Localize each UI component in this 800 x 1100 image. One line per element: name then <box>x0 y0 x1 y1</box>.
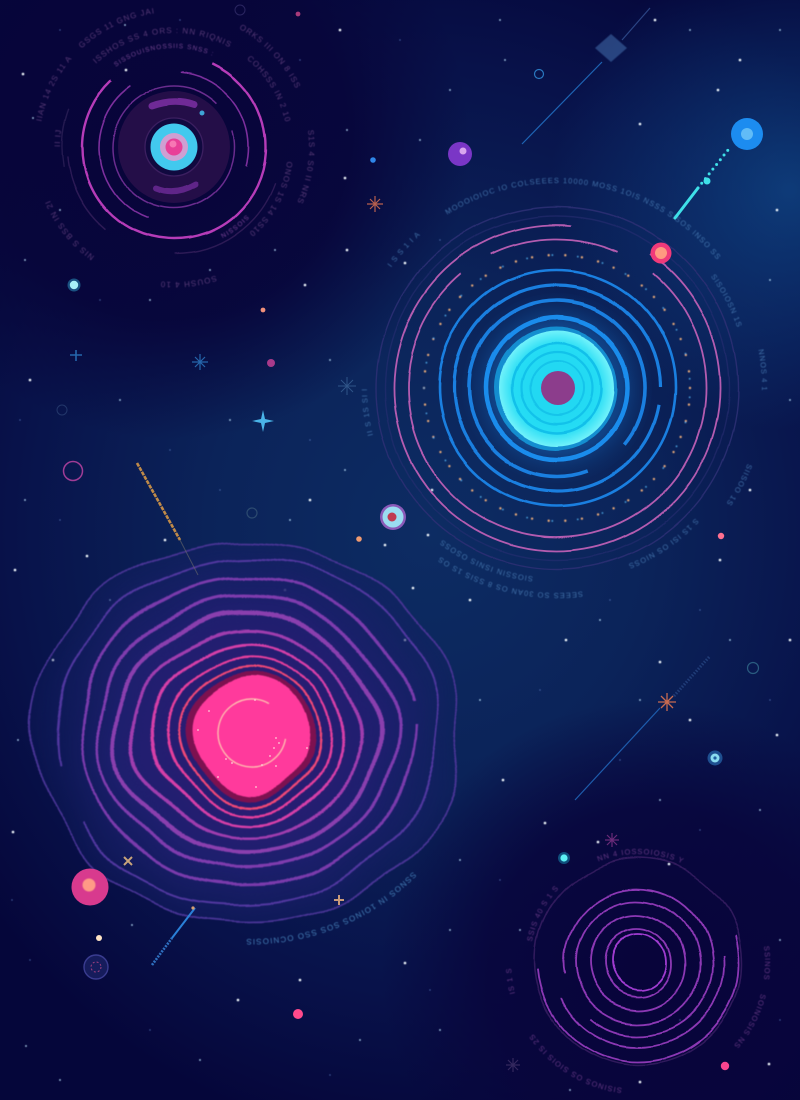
sparks on core <box>198 700 307 787</box>
orbital text: SIOSSIN <box>220 215 250 238</box>
orbital text: S1S 4 S0 II NRS <box>298 130 316 204</box>
planet: purple <box>448 142 472 166</box>
orbital text: NIS S BSS IN 2I <box>45 200 94 260</box>
star: dim lower <box>506 1058 520 1072</box>
planet: pink lower <box>72 868 108 906</box>
ring: dim right <box>748 662 758 674</box>
blue rings <box>438 269 676 507</box>
orbital text: SOUSH 4 10 <box>160 276 217 288</box>
ring: dim left <box>57 405 67 415</box>
dot: cyan <box>68 278 80 292</box>
small planet: right <box>708 750 722 766</box>
pink rings <box>330 161 784 615</box>
ring: dim top <box>235 5 245 15</box>
orbital text: ONOS 1S 14 SS10 <box>250 162 293 236</box>
orbital text: SIISOO 1S <box>726 464 752 506</box>
small ring: upper <box>534 70 544 78</box>
rings <box>30 531 464 933</box>
orbital text: SISINOS OS SIOIS IS 2S <box>529 1034 622 1094</box>
orbital text: SSINOS <box>764 946 770 980</box>
dot: spark <box>334 895 344 905</box>
dot: pink lower <box>293 1009 303 1019</box>
orbital text: MOOOIOIOC IO COLSEEES 10000 MOSS 1OIS NSSS SISOS INSO SS <box>444 177 720 260</box>
comet: cyan <box>675 150 728 218</box>
orbital text: IS 1 S S1 <box>506 968 515 994</box>
orbital text: SISSOUISNOSSIIS SNSS : <box>114 43 214 67</box>
dot: pink right <box>721 1062 729 1070</box>
star: left blue <box>70 350 82 361</box>
dot: spark left <box>124 857 132 865</box>
streak: lower right <box>575 656 710 800</box>
orbital text: SSIS 40 S 1 S <box>526 886 558 942</box>
orbital text: SISOIOSN 1S <box>711 274 742 327</box>
orbital text: SIOSSIN ISNIS OSOSS <box>440 540 533 582</box>
star: orange <box>367 196 383 212</box>
dot: blue <box>370 157 376 163</box>
orbital text: II S 1S SI I <box>362 389 373 436</box>
planet shadow <box>145 118 203 176</box>
streak: lower blue <box>152 906 195 965</box>
orbital text: ISSHOS SS 4 ORS : NN RIQNIS <box>92 27 232 64</box>
streak: gold <box>137 463 198 575</box>
orbital text <box>362 177 768 599</box>
star: deep blue <box>192 354 208 370</box>
star: orange lower <box>658 693 676 711</box>
glow <box>462 293 652 483</box>
planet: coral <box>650 242 672 264</box>
orbital text: GSGS 11 GNG JAI <box>78 8 154 48</box>
orbital text: IIAN 14 2S 11 A <box>36 56 72 122</box>
streak: upper blue <box>522 8 650 144</box>
orbital text: SEEES SO 30AN OS 8 SSIS 1S OS <box>438 557 583 599</box>
star: magenta lower <box>605 833 619 847</box>
dot: cream <box>96 935 102 941</box>
orbital text: SSNOS IN 1OINOS SOS SSO OCNIOSIS <box>246 872 416 946</box>
dot: top magenta <box>296 12 300 16</box>
moon <box>200 110 204 116</box>
orbital text: II IJ <box>54 130 62 147</box>
orbital text: COHSSS IN 2 10 <box>248 56 291 122</box>
rings <box>23 0 325 298</box>
faint outer rings <box>376 207 738 569</box>
orbital text <box>36 8 316 288</box>
orbital text: ORKS III ON 8 ISS <box>240 24 300 88</box>
dotted orbit <box>415 246 699 530</box>
disc: dark halo <box>118 91 230 203</box>
blue ring system <box>362 177 768 599</box>
ring planet: left <box>64 462 82 480</box>
dot: coral right <box>718 533 724 539</box>
planet: lilac ring <box>380 504 406 530</box>
star: bright blue <box>252 410 274 432</box>
centre planet <box>541 371 575 405</box>
dot: cyan lower <box>558 852 570 864</box>
orbital text: SOINOSIS NS <box>734 994 766 1048</box>
inner arc <box>213 694 291 772</box>
star: dim <box>338 377 356 395</box>
ring planet: lower <box>84 955 108 979</box>
orbital text: I S S 1 I A <box>387 232 420 268</box>
top-left ring system <box>36 8 316 288</box>
dot: magenta <box>267 359 275 367</box>
orbital text: NNOS 4 1 <box>758 349 768 390</box>
planet core <box>150 124 198 170</box>
cyan core <box>494 326 618 450</box>
pink ring system <box>27 542 458 946</box>
ring: dim mid <box>247 508 257 518</box>
dot: orange mid <box>356 536 362 542</box>
planet: blue <box>731 118 763 150</box>
rings <box>516 840 760 1084</box>
orbital text: NN 4 IOSSOIOSIS Y <box>596 848 684 863</box>
dot: orange <box>261 308 265 312</box>
orbital text: S 1S ISI OS NIOSS <box>628 518 699 569</box>
